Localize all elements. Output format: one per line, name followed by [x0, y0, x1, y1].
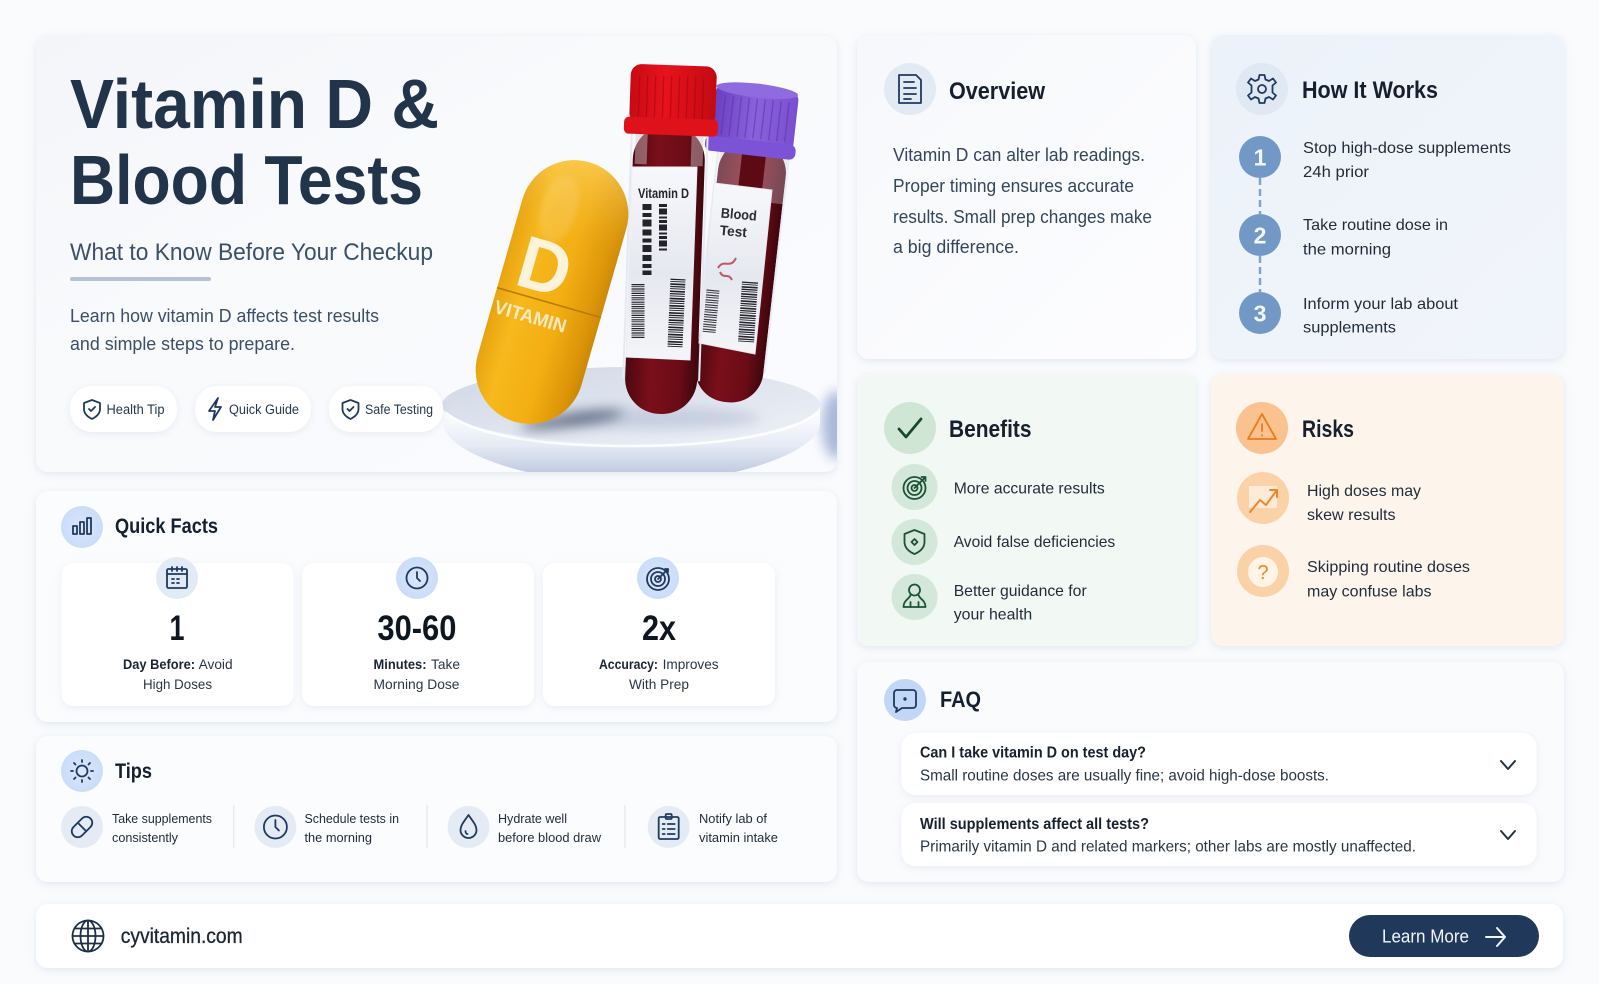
- benefit: better guidance: your health: [954, 606, 1032, 624]
- faq item 1: Can I take vitamin D on test day?: [920, 744, 1146, 762]
- purple tube label: Blood: [720, 205, 758, 224]
- red tube label: [626, 167, 697, 360]
- step 1: Stop high-dose supplements: [1303, 140, 1511, 157]
- benefit: better guidance: Better guidance for: [954, 583, 1087, 600]
- benefit: accurate results: [892, 464, 1105, 510]
- overview text: Vitamin D can alter lab readings.: [893, 145, 1145, 165]
- panel: risks: [1211, 374, 1564, 646]
- footer bar: [36, 904, 1563, 968]
- icon: globe: [72, 920, 104, 952]
- step 2: the morning: [1303, 242, 1391, 258]
- red tube label: Vitamin D: [638, 185, 689, 201]
- step 2: [1239, 214, 1448, 258]
- icon: chat bubble: [884, 679, 926, 721]
- hero description: [70, 306, 379, 354]
- fact card: 1 day before: Avoid: [199, 656, 233, 672]
- step 3: [1239, 292, 1459, 336]
- risk: skipping doses: Skipping routine doses: [1307, 559, 1470, 576]
- step 3: Inform your lab about: [1303, 296, 1459, 313]
- benefit: avoid false deficiencies: Avoid false deficiencies: [954, 534, 1115, 551]
- panel: faq: [857, 662, 1564, 882]
- hero description: Learn how vitamin D affects test results: [70, 306, 379, 326]
- step 3: 3: [1254, 300, 1266, 326]
- tip: hydrate: before blood draw: [498, 830, 602, 845]
- benefit: avoid false deficiencies: [892, 519, 1115, 565]
- fact card: 30-60 minutes: Minutes:: [374, 656, 426, 672]
- fact card: 2x accuracy: Accuracy:: [599, 656, 658, 672]
- fact card: 1 day before: [62, 557, 294, 706]
- tip: notify lab: Notify lab of: [699, 811, 767, 826]
- fact card: 2x accuracy: With Prep: [629, 676, 689, 692]
- heading: Tips: Tips: [115, 760, 152, 783]
- fact card: 30-60 minutes: [302, 557, 534, 706]
- tag: Quick Guide: Quick Guide: [229, 402, 299, 417]
- hero subtitle: What to Know Before Your Checkup: [70, 239, 433, 266]
- icon: check: [884, 402, 936, 454]
- subtitle underline: [70, 277, 211, 281]
- tag: Health Tip: Health Tip: [106, 402, 164, 417]
- fact card: 30-60 minutes: Take: [431, 656, 460, 672]
- tip: hydrate: [448, 806, 602, 848]
- learn more button: [1349, 915, 1539, 957]
- capsule: D: [508, 219, 581, 314]
- faq item 1: [902, 733, 1536, 795]
- risk: skipping doses: may confuse labs: [1307, 584, 1432, 600]
- capsule: VITAMIN: [492, 297, 569, 338]
- risk: high doses: [1237, 472, 1421, 524]
- faq item 2: Will supplements affect all tests?: [920, 816, 1149, 833]
- risk: skipping doses: ?: [1257, 562, 1269, 584]
- risk: high doses: High doses may: [1307, 483, 1421, 500]
- fact card: 30-60 minutes: 30-60: [377, 609, 456, 648]
- fact card: 1 day before: High Doses: [143, 676, 212, 692]
- step connectors: [1259, 178, 1261, 292]
- tip: notify lab: vitamin intake: [699, 830, 778, 845]
- heading: Overview: Overview: [949, 78, 1045, 105]
- platform: [442, 367, 837, 472]
- fact card: 30-60 minutes: Morning Dose: [374, 676, 460, 692]
- icon: gear: [1236, 63, 1288, 115]
- purple tube: [697, 82, 798, 402]
- tip: schedule tests: the morning: [304, 830, 372, 845]
- tip: notify lab: [648, 806, 778, 848]
- panel: tips: [36, 736, 837, 882]
- icon: sun: [61, 750, 103, 792]
- tag: Safe Testing: [329, 386, 443, 432]
- tag: Health Tip: [70, 386, 177, 432]
- step 3: supplements: [1303, 320, 1396, 336]
- risk: high doses: skew results: [1307, 507, 1396, 524]
- overview text: a big difference.: [893, 237, 1019, 257]
- hero description: and simple steps to prepare.: [70, 334, 295, 354]
- faq item 1: Small routine doses are usually fine; avoid high-dose boosts.: [920, 768, 1329, 784]
- fact card: 2x accuracy: Improves: [663, 656, 719, 672]
- tag: Safe Testing: Safe Testing: [365, 402, 433, 417]
- tip: take supplements: [61, 806, 212, 848]
- fact card: 1 day before: 1: [170, 609, 184, 648]
- hero title: [70, 65, 439, 219]
- step 2: 2: [1254, 222, 1266, 248]
- tip: schedule tests: Schedule tests in: [304, 811, 399, 826]
- purple tube label: Test: [719, 222, 748, 240]
- hero illustration: capsule and blood tubes: [442, 64, 850, 484]
- step 1: 1: [1254, 144, 1267, 170]
- icon: document: [884, 63, 936, 115]
- benefit: better guidance: [892, 574, 1087, 624]
- tag: Quick Guide: [195, 386, 311, 432]
- panel: how it works: [1211, 35, 1564, 359]
- overview text: [893, 145, 1152, 257]
- tip: schedule tests: [254, 806, 399, 848]
- heading: FAQ: FAQ: [940, 687, 981, 712]
- step 1: [1239, 136, 1511, 181]
- panel: overview: [857, 35, 1196, 359]
- hero title: Blood Tests: [70, 141, 423, 219]
- heading: How It Works: How It Works: [1302, 77, 1438, 104]
- step 2: Take routine dose in: [1303, 217, 1448, 234]
- heading: Benefits: Benefits: [949, 416, 1032, 443]
- heading: Quick Facts: Quick Facts: [115, 515, 218, 538]
- icon: bar chart: [61, 506, 103, 548]
- website: cyvitamin.com: [121, 925, 243, 948]
- fact card: 2x accuracy: [543, 557, 775, 706]
- faq item 2: Primarily vitamin D and related markers; other labs are mostly unaffected.: [920, 838, 1416, 856]
- panel: benefits: [857, 374, 1196, 646]
- tip: take supplements: consistently: [112, 830, 178, 845]
- panel: quick facts: [36, 491, 837, 722]
- heading: Risks: Risks: [1302, 416, 1354, 443]
- icon: warning: [1236, 402, 1288, 454]
- benefit: accurate results: More accurate results: [954, 480, 1105, 498]
- overview text: results. Small prep changes make: [893, 207, 1152, 227]
- overview text: Proper timing ensures accurate: [893, 176, 1134, 196]
- fact card: 2x accuracy: 2x: [642, 609, 676, 648]
- panel: hero: [36, 36, 850, 484]
- tip: hydrate: Hydrate well: [498, 811, 567, 826]
- faq item 2: [902, 803, 1536, 866]
- fact card: 1 day before: Day Before:: [123, 656, 195, 672]
- risk: skipping doses: [1237, 545, 1470, 600]
- hero title: Vitamin D &: [70, 65, 439, 143]
- red tube: [614, 64, 720, 416]
- step 1: 24h prior: [1303, 164, 1370, 181]
- capsule: [476, 160, 628, 424]
- purple tube label: [699, 183, 772, 354]
- learn more button: Learn More: [1382, 926, 1469, 946]
- tip: take supplements: Take supplements: [112, 811, 212, 826]
